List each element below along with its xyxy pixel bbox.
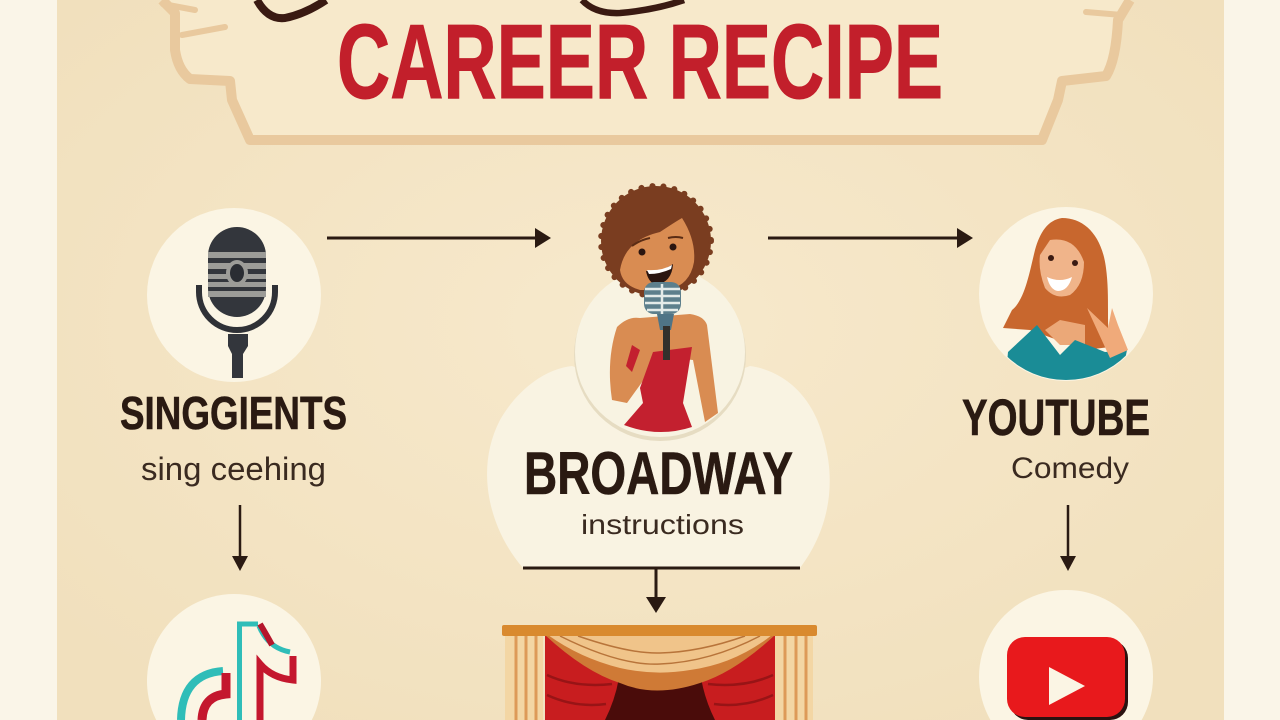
label: broadway: BROADWAY: [524, 440, 793, 507]
panel: broadway cloud: [487, 186, 830, 568]
icon: youtuber portrait: [979, 207, 1153, 385]
arrow: broadway to stage: [523, 568, 800, 613]
label: youtube: YOUTUBE: [962, 389, 1150, 446]
label: singgients: SINGGIENTS: [120, 387, 347, 439]
cursive title fragments: [257, 0, 684, 18]
arrow: down to tiktok: [232, 505, 248, 571]
icon: youtube logo: [979, 590, 1153, 720]
title banner: [162, 0, 1130, 140]
icon: tiktok: [147, 594, 321, 720]
icon: theatre stage: [502, 625, 817, 720]
label: comedy: Comedy: [1011, 452, 1129, 485]
label: sing ceehing: sing ceehing: [141, 451, 326, 487]
icon: microphone: [147, 208, 321, 382]
arrow: down to youtube logo: [1060, 505, 1076, 571]
icon: singer: [601, 186, 718, 432]
arrow: broadway to youtube: [768, 228, 973, 248]
title: career recipe: CAREER RECIPE: [337, 3, 943, 121]
arrow: singing to broadway: [327, 228, 551, 248]
label: instructions: instructions: [581, 509, 744, 540]
